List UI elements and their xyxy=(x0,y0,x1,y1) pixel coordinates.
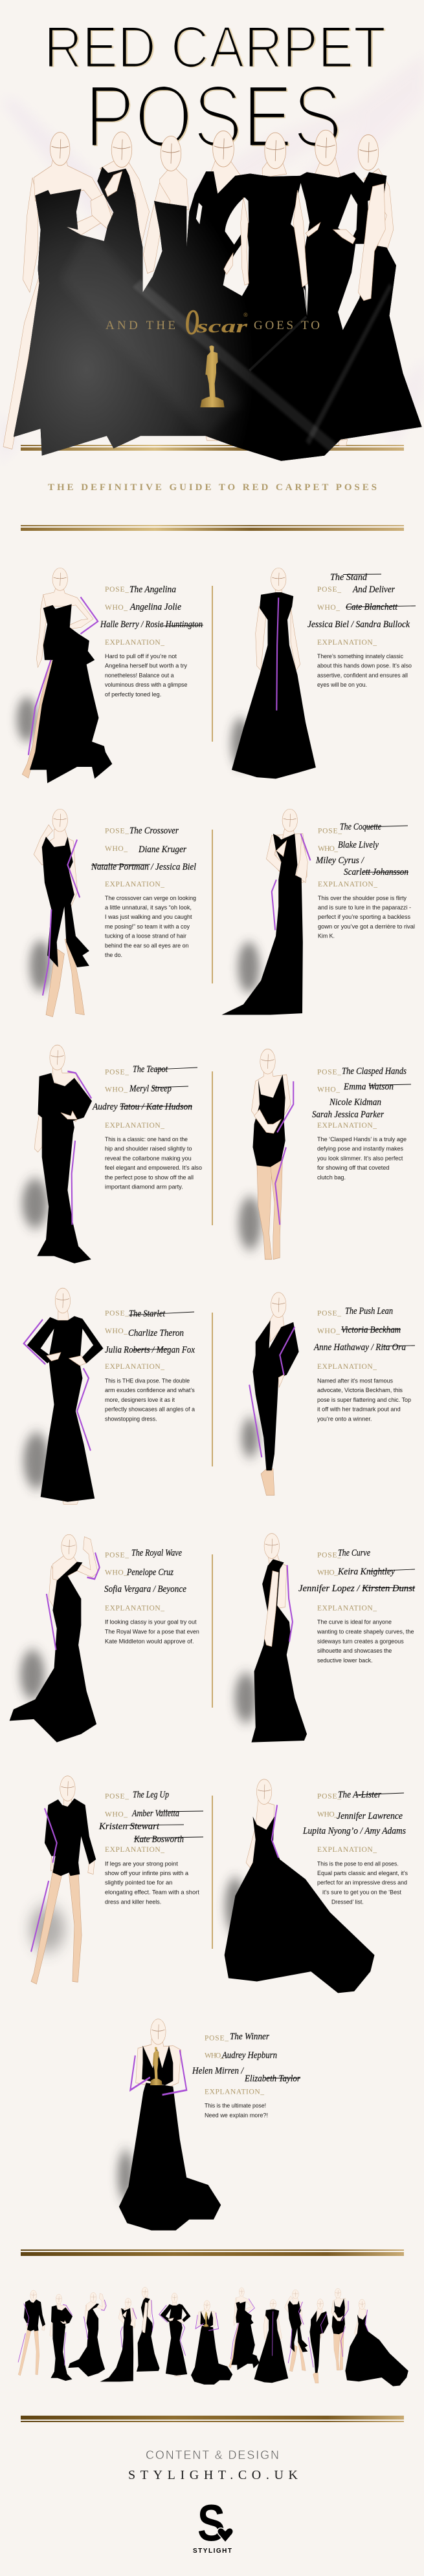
figure: the angelina xyxy=(17,568,112,783)
details: the leg up: WHO_ xyxy=(105,1810,128,1818)
details: the push lean: pose is super flattering and chic. Top xyxy=(317,1397,411,1404)
oscar script logotype: scar xyxy=(195,317,249,337)
details: the curve: seductive lower back. xyxy=(317,1657,373,1664)
details: the curve: The Curve xyxy=(338,1548,370,1558)
details: the coquette: WHO_ xyxy=(318,845,338,853)
details: the coquette: gown or you’ve got a derrière to rival xyxy=(318,923,415,930)
details: the coquette: Blake Lively xyxy=(338,840,379,850)
details: the clasped hands: WHO_ xyxy=(317,1086,340,1094)
oscar script logotype: ® xyxy=(243,312,248,318)
panel: the push lean xyxy=(241,1293,415,1496)
title line: red carpet: RED CARPET xyxy=(44,15,386,80)
details: the stand and deliver: eyes will be on you. xyxy=(317,682,367,689)
details: the stand and deliver: WHO_ xyxy=(317,604,340,612)
details: the stand and deliver: about this hands down pose. It’s also xyxy=(317,663,412,670)
details: the leg up: EXPLANATION_ xyxy=(105,1846,164,1854)
details: the winner: Elizabeth Taylor xyxy=(244,2074,300,2084)
details: the stand and deliver: assertive, confident and ensures all xyxy=(317,672,408,679)
oscar script logotype xyxy=(185,303,249,343)
details: the angelina: WHO_ xyxy=(105,604,128,612)
details: the stand and deliver: And Deliver xyxy=(352,585,395,595)
details: the coquette: and is sure to lure in the paparazzi - xyxy=(318,904,411,912)
details: the a-lister: The A-Lister xyxy=(338,1790,381,1800)
main title xyxy=(44,15,386,166)
panel: the angelina xyxy=(17,568,203,783)
details: the clasped hands: The Clasped Hands xyxy=(342,1066,407,1077)
details: the winner: This is the ultimate pose! xyxy=(205,2102,266,2109)
logo: stylight: STYLIGHT xyxy=(193,2548,232,2555)
details: the starlet: WHO_ xyxy=(105,1327,128,1335)
details: the push lean: Named after it’s most famous xyxy=(317,1377,393,1384)
details: the leg up: The Leg Up xyxy=(133,1790,169,1800)
details: the clasped hands: EXPLANATION_ xyxy=(317,1122,377,1130)
details: the royal wave: WHO_ xyxy=(105,1569,128,1576)
details: the angelina: Angelina herself but worth a try xyxy=(105,663,187,670)
details: the curve: POSE_ xyxy=(317,1552,341,1560)
details: the teapot: Meryl Streep xyxy=(129,1084,172,1094)
details: the teapot: important diamond arm party. xyxy=(105,1184,183,1191)
panel: the curve xyxy=(235,1534,416,1743)
details: the crossover: I was just walking and you caught xyxy=(105,914,192,921)
panel: the teapot xyxy=(22,1045,202,1263)
details: the starlet: EXPLANATION_ xyxy=(105,1363,164,1371)
details: the curve: wanting to create shapely curves, the xyxy=(317,1628,414,1636)
gold rule under hero xyxy=(21,445,404,451)
figure: the crossover xyxy=(30,809,89,1017)
details: the teapot: The Teapot xyxy=(133,1064,168,1075)
details: the stand and deliver xyxy=(307,572,416,689)
details: the clasped hands: defying pose and instantly makes xyxy=(317,1146,403,1153)
figure: the leg up xyxy=(30,1776,96,1984)
details: the leg up: slightly pointed toe for an xyxy=(105,1880,172,1887)
details: the winner: Helen Mirren / xyxy=(192,2066,245,2076)
details: the royal wave xyxy=(104,1548,199,1645)
details: the winner: Audrey Hepburn xyxy=(221,2050,277,2061)
icon: gold oscar statuette xyxy=(200,345,225,407)
details: the leg up: POSE_ xyxy=(105,1792,129,1800)
details: the winner: EXPLANATION_ xyxy=(205,2088,264,2096)
details: the crossover: behind the ear so all eyes are on xyxy=(105,942,189,949)
details: the leg up xyxy=(98,1790,203,1905)
details: the royal wave: Sofia Vergara / Beyonce xyxy=(104,1584,186,1594)
details: the starlet: more, designers love it as it xyxy=(105,1397,175,1404)
details: the push lean: WHO_ xyxy=(317,1327,340,1335)
gold rule below line-up xyxy=(21,2416,404,2422)
details: the leg up: Amber Valletta xyxy=(131,1809,179,1819)
details: the winner: WHO_ xyxy=(205,2052,224,2060)
details: the a-lister: This is the pose to end all poses. xyxy=(317,1860,399,1867)
details: the clasped hands: The ‘Clasped Hands’ is a truly age xyxy=(317,1136,407,1143)
figure: the teapot xyxy=(22,1045,92,1263)
details: the leg up: Kate Bosworth xyxy=(133,1834,184,1845)
details: the push lean: POSE_ xyxy=(317,1310,341,1318)
panel: the royal wave xyxy=(10,1534,199,1743)
details: the angelina: nonetheless! Balance out a xyxy=(105,672,174,679)
details: the winner: Need we explain more?! xyxy=(205,2112,268,2119)
details: the starlet xyxy=(105,1309,195,1422)
details: the teapot xyxy=(92,1064,202,1191)
column dividers xyxy=(212,586,213,1949)
oscar script logotype: O xyxy=(185,303,199,343)
details: the clasped hands: clutch bag. xyxy=(317,1174,346,1181)
panel: the a-lister xyxy=(225,1779,408,1993)
panel: the starlet xyxy=(23,1288,195,1504)
panel: the clasped hands xyxy=(239,1049,411,1260)
details: the a-lister xyxy=(302,1790,408,1905)
figure: the push lean xyxy=(241,1293,299,1496)
details: the angelina: EXPLANATION_ xyxy=(105,639,164,647)
hero: background light streaks xyxy=(0,54,424,463)
details: the clasped hands: Nicole Kidman xyxy=(329,1097,381,1108)
details: the starlet: Charlize Theron xyxy=(128,1328,184,1338)
figure skin layer xyxy=(3,155,394,449)
panel: the stand and deliver xyxy=(231,568,416,778)
details: the winner: The Winner xyxy=(230,2032,269,2042)
details: the a-lister: Lupita Nyong’o / Amy Adams xyxy=(302,1826,406,1836)
details: the starlet: This is THE diva pose. The double xyxy=(105,1377,190,1384)
details: the teapot: reveal the collarbone making you xyxy=(105,1155,192,1162)
panel: the leg up xyxy=(30,1776,203,1984)
details: the a-lister: perfect for an impressive dress and xyxy=(317,1880,407,1887)
details: the crossover: EXPLANATION_ xyxy=(105,881,164,888)
figure: the starlet xyxy=(23,1288,104,1504)
details: the coquette: Kim K. xyxy=(318,933,335,940)
panel: the crossover xyxy=(30,809,196,1017)
details: the clasped hands xyxy=(312,1066,411,1181)
details: the a-lister: it’s sure to get you on the ‘Best xyxy=(322,1889,401,1896)
details: the coquette: POSE_ xyxy=(318,828,342,835)
details: the stand and deliver: The Stand xyxy=(330,572,367,583)
details: the teapot: This is a classic: one hand on the xyxy=(105,1136,188,1143)
details: the curve: WHO_ xyxy=(317,1569,338,1576)
details: the a-lister: Dressed’ list. xyxy=(331,1898,364,1905)
details: the a-lister: Jennifer Lawrence xyxy=(337,1811,403,1821)
details: the curve xyxy=(298,1548,416,1664)
details: the angelina: of perfectly toned leg. xyxy=(105,691,161,698)
subtitle: and the oscar goes to: AND THE xyxy=(106,319,175,332)
details: the coquette xyxy=(315,822,415,940)
heads xyxy=(50,130,379,171)
details: the starlet: showstopping dress. xyxy=(105,1416,157,1422)
details: the starlet: perfectly showcases all angles of a xyxy=(105,1406,195,1413)
panel: the coquette xyxy=(222,809,415,1014)
details: the crossover: POSE_ xyxy=(105,828,129,835)
line-up of all thirteen poses xyxy=(18,2287,408,2387)
details: the coquette: Scarlett Johansson xyxy=(344,867,408,877)
details: the crossover: a little unnatural, it says “oh look, xyxy=(105,904,192,912)
details: the push lean: The Push Lean xyxy=(345,1306,393,1316)
details: the starlet: The Starlet xyxy=(129,1309,166,1319)
details: the teapot: feel elegant and empowered. It’s also xyxy=(105,1165,202,1172)
details: the clasped hands: for showing off that coveted xyxy=(317,1165,390,1172)
details: the leg up: If legs are your strong point xyxy=(105,1860,178,1867)
details: the starlet: Julia Roberts / Megan Fox xyxy=(105,1345,195,1355)
details: the curve: Keira Knightley xyxy=(337,1567,395,1577)
details: the push lean: Anne Hathaway / Rita Ora xyxy=(313,1342,406,1353)
details: the royal wave: EXPLANATION_ xyxy=(105,1605,164,1613)
black gown mass with light rays xyxy=(0,158,424,466)
details: the angelina: Halle Berry / Rosie Huntington xyxy=(100,619,203,630)
details: the angelina: voluminous dress with a glimpse xyxy=(105,682,187,689)
details: the stand and deliver: There’s something innately classic xyxy=(317,653,403,660)
details: the push lean: EXPLANATION_ xyxy=(317,1363,377,1371)
details: the crossover: tucking of a loose strand of hair xyxy=(105,933,186,940)
details: the crossover: me posing!” so team it with a coy xyxy=(105,923,190,930)
details: the angelina: Angelina Jolie xyxy=(129,602,181,612)
details: the royal wave: The Royal Wave for a pose that even xyxy=(105,1628,199,1636)
details: the crossover: Diane Kruger xyxy=(138,844,186,855)
logo: stylight: S xyxy=(197,2494,225,2551)
figure: the coquette xyxy=(222,809,311,1014)
details: the a-lister: EXPLANATION_ xyxy=(317,1846,377,1854)
details: the clasped hands: Sarah Jessica Parker xyxy=(312,1110,384,1120)
details: the push lean xyxy=(313,1306,415,1422)
subtitle: and the oscar goes to: GOES TO xyxy=(254,319,320,332)
figure: the curve xyxy=(235,1534,307,1743)
strapline: THE DEFINITIVE GUIDE TO RED CARPET POSES xyxy=(48,482,377,493)
details: the teapot: hip and shoulder raised slightly to xyxy=(105,1146,192,1153)
details: the clasped hands: you look slimmer. It’s also perfect xyxy=(317,1155,403,1162)
figure: the royal wave xyxy=(10,1534,100,1743)
details: the teapot: WHO_ xyxy=(105,1086,128,1094)
details: the angelina: Hard to pull off if you’re not xyxy=(105,653,177,660)
details: the angelina: POSE_ xyxy=(105,586,129,594)
details: the teapot: Audrey Tatou / Kate Hudson xyxy=(92,1102,192,1112)
details: the crossover: The Crossover xyxy=(129,826,179,836)
gold rule above poses xyxy=(21,525,404,531)
figure: the winner xyxy=(118,2019,221,2231)
details: the teapot: POSE_ xyxy=(105,1068,129,1076)
details: the winner: POSE_ xyxy=(205,2034,229,2042)
details: the coquette: The Coquette xyxy=(340,822,381,832)
details: the curve: silhouette and showcases the xyxy=(317,1648,392,1655)
details: the leg up: Kristen Stewart xyxy=(98,1821,160,1832)
details: the coquette: perfect if you’re sporting a backless xyxy=(318,914,410,921)
details: the crossover xyxy=(91,826,196,959)
hero: group of seven figures in black gowns xyxy=(0,130,424,466)
details: the stand and deliver: Cate Blanchett xyxy=(346,602,398,612)
details: the a-lister: Equal parts classic and elegant, it’s xyxy=(317,1870,408,1877)
figure: the a-lister xyxy=(225,1779,375,1993)
details: the angelina xyxy=(100,585,203,698)
details: the royal wave: Kate Middleton would approve of. xyxy=(105,1638,194,1645)
details: the royal wave: POSE_ xyxy=(105,1552,129,1560)
details: the teapot: EXPLANATION_ xyxy=(105,1122,164,1130)
details: the stand and deliver: POSE_ xyxy=(317,586,341,594)
details: the push lean: advocate, Victoria Beckham, this xyxy=(317,1387,403,1394)
details: the angelina: The Angelina xyxy=(129,585,176,595)
details: the curve: The curve is ideal for anyone xyxy=(317,1619,392,1626)
details: the starlet: POSE_ xyxy=(105,1310,129,1318)
details: the leg up: elongating effect. Team with a short xyxy=(105,1889,199,1896)
credit: content and design: CONTENT & DESIGN xyxy=(146,2449,279,2462)
details: the coquette: EXPLANATION_ xyxy=(318,881,377,888)
details: the curve: Jennifer Lopez / Kirsten Dunst xyxy=(298,1583,416,1594)
details: the crossover: The crossover can verge on looking xyxy=(105,895,196,902)
figure: the stand and deliver xyxy=(231,568,316,778)
details: the crossover: Natalie Portman / Jessica Biel xyxy=(91,862,196,872)
details: the curve: EXPLANATION_ xyxy=(317,1605,377,1613)
details: the stand and deliver: Jessica Biel / Sandra Bullock xyxy=(307,619,410,630)
panel: the winner xyxy=(118,2019,300,2231)
credit: website: STYLIGHT.CO.UK xyxy=(128,2468,298,2482)
details: the stand and deliver: EXPLANATION_ xyxy=(317,639,377,647)
details: the coquette: This over the shoulder pose is flirty xyxy=(318,895,407,902)
details: the royal wave: The Royal Wave xyxy=(131,1548,182,1558)
details: the push lean: you’re onto a winner. xyxy=(317,1416,372,1422)
details: the push lean: it off with her tradmark pout and xyxy=(317,1406,401,1413)
details: the starlet: arm exudes confidence and what’s xyxy=(105,1387,195,1394)
details: the teapot: the perfect pose to show off the all xyxy=(105,1174,194,1181)
details: the a-lister: POSE_ xyxy=(317,1792,341,1800)
subtitle: and the oscar goes to xyxy=(106,303,320,343)
icon: heart xyxy=(218,2528,233,2542)
gold rule above line-up xyxy=(21,2249,404,2256)
details: the royal wave: If looking classy is your goal try out xyxy=(105,1619,197,1626)
title line: poses: POSES xyxy=(85,67,342,166)
details: the crossover: WHO_ xyxy=(105,845,128,853)
figure: the clasped hands xyxy=(239,1049,293,1260)
details: the royal wave: Penelope Cruz xyxy=(126,1567,173,1578)
details: the clasped hands: Emma Watson xyxy=(343,1082,394,1092)
details: the leg up: show off your infinte pins with a xyxy=(105,1870,189,1877)
details: the a-lister: WHO_ xyxy=(317,1810,338,1818)
details: the coquette: Miley Cyrus / xyxy=(315,855,365,866)
details: the winner xyxy=(192,2032,300,2119)
details: the curve: sideways turn creates a gorgeous xyxy=(317,1638,404,1645)
gaps between gowns with arms xyxy=(105,171,385,330)
details: the push lean: Victoria Beckham xyxy=(341,1325,401,1335)
details: the clasped hands: POSE_ xyxy=(317,1068,341,1076)
details: the leg up: dress and killer heels. xyxy=(105,1898,161,1905)
details: the crossover: the do. xyxy=(105,952,122,959)
